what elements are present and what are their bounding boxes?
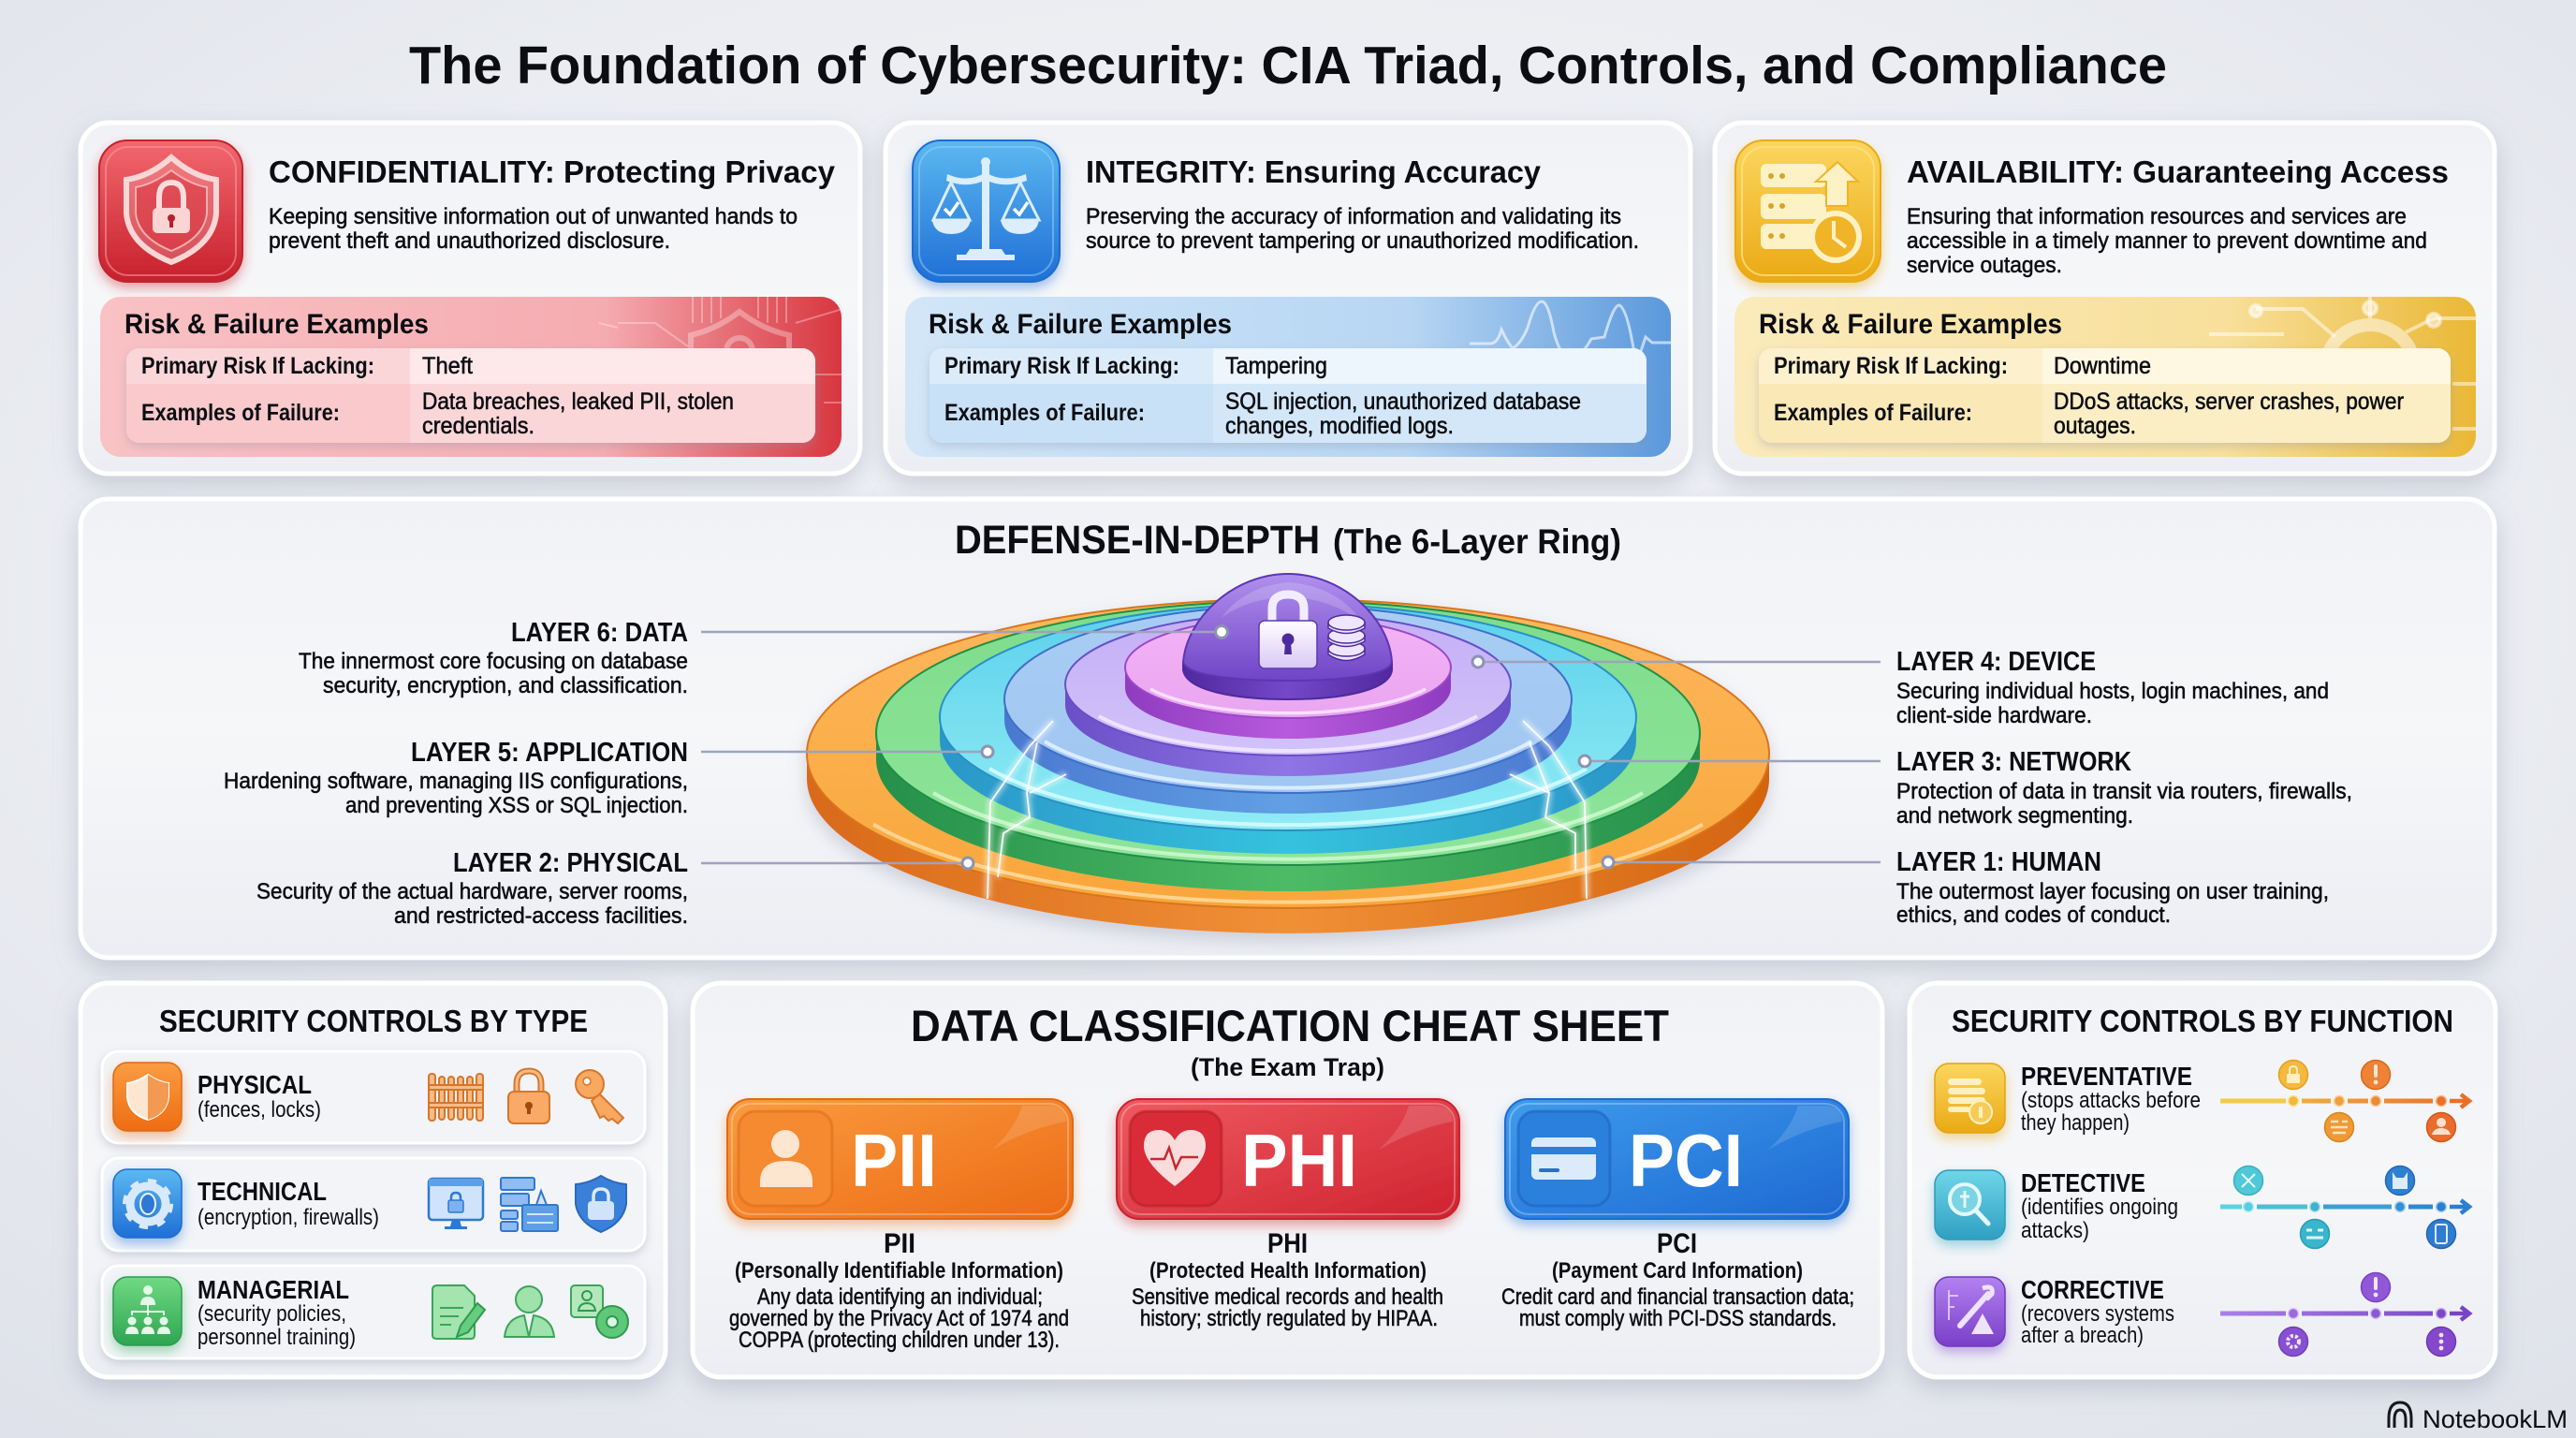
label: layer 4 bbox=[1896, 647, 2329, 728]
text: PII bbox=[729, 1228, 1069, 1353]
row: physical bbox=[102, 1051, 645, 1143]
label: layer 3 bbox=[1896, 747, 2352, 829]
title: The Foundation of Cybersecurity: CIA Triad, Controls, and Compliance bbox=[409, 36, 2167, 95]
description: Preserving the accuracy of information and validating its bbox=[1086, 204, 1621, 229]
description bbox=[1086, 204, 1639, 254]
text: PHYSICAL bbox=[198, 1070, 312, 1099]
text: they happen) bbox=[2021, 1110, 2130, 1136]
icon: purple wrench tile bbox=[1935, 1277, 2005, 1346]
text: PHI: PHI bbox=[1267, 1228, 1308, 1259]
risk table: Examples of Failure: bbox=[944, 400, 1145, 426]
label: layer 2: Security of the actual hardware, server rooms, bbox=[256, 879, 688, 904]
risk table: Primary Risk If Lacking: bbox=[944, 353, 1179, 379]
icon: person bbox=[760, 1130, 812, 1187]
icon: key bbox=[576, 1070, 623, 1123]
risk table: Tampering bbox=[1225, 353, 1327, 379]
row: corrective bbox=[1935, 1273, 2469, 1356]
label: layer 5: LAYER 5: APPLICATION bbox=[411, 738, 688, 768]
layer 3 cyan ring bbox=[940, 604, 1636, 854]
text: PII: Any data identifying an individual; bbox=[757, 1284, 1043, 1310]
description: accessible in a timely manner to prevent downtime and bbox=[1907, 228, 2427, 254]
label: layer 2: and restricted-access facilities. bbox=[394, 903, 688, 929]
label: layer 1 bbox=[1896, 847, 2329, 928]
panel: availability bbox=[1715, 123, 2495, 474]
panel: integrity bbox=[886, 123, 1690, 474]
heading: SECURITY CONTROLS BY TYPE bbox=[159, 1004, 588, 1038]
text: PREVENTATIVE bbox=[2021, 1062, 2192, 1091]
label: layer 4: Securing individual hosts, login machines, and bbox=[1896, 679, 2329, 704]
text: PII: COPPA (protecting children under 13). bbox=[739, 1328, 1060, 1353]
badge: PII bbox=[727, 1099, 1073, 1219]
icon: profile and gear bbox=[571, 1285, 628, 1338]
section heading: DEFENSE-IN-DEPTH bbox=[955, 518, 1320, 563]
risk table: outages. bbox=[2054, 413, 2136, 439]
risk table: Primary Risk If Lacking: bbox=[1774, 353, 2008, 379]
label: layer 6: LAYER 6: DATA bbox=[511, 618, 688, 648]
risk table: Theft bbox=[422, 353, 473, 379]
row: detective bbox=[1935, 1167, 2469, 1249]
icon: cyan magnifier tile bbox=[1935, 1170, 2005, 1240]
section heading: (The 6-Layer Ring) bbox=[1333, 522, 1621, 561]
text bbox=[198, 1275, 356, 1350]
layer 1 orange ring bbox=[807, 599, 1769, 933]
text: (fences, locks) bbox=[198, 1097, 321, 1123]
section heading bbox=[955, 518, 1621, 563]
icon: person bbox=[505, 1286, 554, 1337]
text: PHI: history; strictly regulated by HIPAA. bbox=[1140, 1306, 1438, 1331]
label: layer 3: LAYER 3: NETWORK bbox=[1896, 747, 2131, 777]
panel: data classification cheat sheet bbox=[693, 983, 1882, 1377]
text: attacks) bbox=[2021, 1218, 2089, 1243]
text: TECHNICAL bbox=[198, 1177, 327, 1206]
description: Ensuring that information resources and services are bbox=[1907, 204, 2407, 229]
icon: green org chart tile bbox=[113, 1277, 182, 1345]
description bbox=[1907, 204, 2427, 278]
text: PHI: (Protected Health Information) bbox=[1149, 1258, 1427, 1284]
layer 6 pink ring bbox=[1125, 617, 1451, 739]
risk heading: Risk & Failure Examples bbox=[124, 309, 429, 340]
layer 5 violet ring bbox=[1065, 613, 1511, 776]
risk table: Downtime bbox=[2054, 353, 2151, 379]
row: preventative bbox=[1935, 1060, 2469, 1142]
risk table bbox=[126, 348, 815, 443]
text bbox=[2021, 1062, 2201, 1136]
text: PCI bbox=[1501, 1228, 1854, 1331]
risk heading: Risk & Failure Examples bbox=[929, 309, 1232, 340]
text: personnel training) bbox=[198, 1325, 356, 1350]
text: PII: PII bbox=[884, 1228, 915, 1259]
text bbox=[2021, 1168, 2178, 1243]
risk table: Data breaches, leaked PII, stolen bbox=[422, 389, 734, 415]
layer 4 blue ring bbox=[1004, 606, 1572, 814]
icon: card bbox=[1531, 1137, 1596, 1180]
risk table bbox=[929, 348, 1647, 443]
icon: document and pen bbox=[432, 1285, 485, 1339]
icon: lock bbox=[508, 1071, 549, 1123]
label: layer 6: security, encryption, and classification. bbox=[323, 673, 688, 698]
heading: CONFIDENTIALITY: Protecting Privacy bbox=[269, 154, 836, 189]
label: layer 5: and preventing XSS or SQL injection. bbox=[345, 793, 688, 818]
description: prevent theft and unauthorized disclosure. bbox=[269, 228, 670, 254]
risk table bbox=[1759, 348, 2451, 443]
icon: orange shield tile bbox=[113, 1063, 182, 1131]
text: PII: governed by the Privacy Act of 1974 and bbox=[729, 1306, 1069, 1331]
text: PCI: must comply with PCI-DSS standards. bbox=[1519, 1306, 1837, 1331]
text: PCI: PCI bbox=[1657, 1228, 1697, 1259]
timeline bbox=[2220, 1060, 2469, 1142]
heading: INTEGRITY: Ensuring Accuracy bbox=[1086, 154, 1542, 189]
icon: heart with pulse bbox=[1144, 1130, 1206, 1186]
panel: confidentiality bbox=[80, 123, 860, 474]
description: service outages. bbox=[1907, 253, 2062, 278]
text: CORRECTIVE bbox=[2021, 1275, 2164, 1304]
description: source to prevent tampering or unauthorized modification. bbox=[1086, 228, 1639, 254]
risk table: changes, modified logs. bbox=[1225, 413, 1454, 439]
icon: monitor bbox=[429, 1179, 483, 1229]
text: (stops attacks before bbox=[2021, 1088, 2201, 1113]
icon: database bbox=[1328, 615, 1365, 661]
icon: yellow stack tile bbox=[1935, 1064, 2005, 1133]
label: layer 6 bbox=[299, 618, 688, 698]
panel: security controls by function bbox=[1910, 983, 2496, 1377]
risk box bbox=[905, 297, 1671, 457]
NotebookLM watermark: NotebookLM bbox=[2422, 1405, 2568, 1433]
leader lines and dots bbox=[701, 625, 1881, 869]
label: layer 5 bbox=[224, 738, 688, 818]
text: PII: (Personally Identifiable Information) bbox=[735, 1258, 1063, 1284]
label: layer 4: client-side hardware. bbox=[1896, 703, 2092, 728]
label: layer 3: and network segmenting. bbox=[1896, 803, 2133, 829]
label: layer 1: LAYER 1: HUMAN bbox=[1896, 847, 2101, 877]
text: (security policies, bbox=[198, 1301, 346, 1327]
icon: blue shield bbox=[576, 1176, 626, 1232]
icon: server firewall bbox=[501, 1178, 558, 1231]
row: managerial bbox=[102, 1266, 645, 1358]
risk table: SQL injection, unauthorized database bbox=[1225, 389, 1581, 415]
risk table: Examples of Failure: bbox=[1774, 400, 1972, 426]
badge: PCI bbox=[1505, 1099, 1849, 1219]
icon: server with arrow and clock bbox=[1735, 140, 1881, 282]
heading: DATA CLASSIFICATION CHEAT SHEET bbox=[911, 1001, 1669, 1050]
panel: defense in depth bbox=[80, 499, 2495, 958]
description bbox=[269, 204, 798, 254]
badge label: PII bbox=[851, 1119, 937, 1202]
risk table: Primary Risk If Lacking: bbox=[141, 353, 374, 379]
text bbox=[2021, 1275, 2174, 1348]
text bbox=[198, 1177, 379, 1230]
label: layer 3: Protection of data in transit via routers, firewalls, bbox=[1896, 779, 2352, 804]
layered ring diagram bbox=[701, 574, 1881, 933]
subheading: (The Exam Trap) bbox=[1191, 1053, 1384, 1081]
text: DETECTIVE bbox=[2021, 1168, 2145, 1197]
text: (encryption, firewalls) bbox=[198, 1205, 379, 1230]
panel: security controls by type bbox=[80, 983, 666, 1377]
text: PCI: Credit card and financial transaction data; bbox=[1501, 1284, 1854, 1310]
icon: blue gear tile bbox=[113, 1169, 182, 1238]
text: PCI: (Payment Card Information) bbox=[1552, 1258, 1803, 1284]
risk table: credentials. bbox=[422, 413, 534, 439]
layer 2 green ring bbox=[876, 601, 1700, 891]
label: layer 4: LAYER 4: DEVICE bbox=[1896, 647, 2096, 677]
risk table: Examples of Failure: bbox=[141, 400, 340, 426]
lightning glow bbox=[988, 721, 1587, 899]
label: layer 5: Hardening software, managing IIS configurations, bbox=[224, 769, 688, 794]
purple core dome bbox=[1183, 574, 1392, 699]
heading: SECURITY CONTROLS BY FUNCTION bbox=[1952, 1004, 2453, 1038]
text: after a breach) bbox=[2021, 1323, 2144, 1348]
icon: blue scales bbox=[913, 140, 1060, 282]
risk box bbox=[100, 297, 842, 457]
text bbox=[198, 1070, 321, 1123]
label: layer 1: ethics, and codes of conduct. bbox=[1896, 902, 2171, 928]
label: layer 1: The outermost layer focusing on user training, bbox=[1896, 879, 2329, 904]
label: layer 2: LAYER 2: PHYSICAL bbox=[453, 848, 688, 878]
badge label: PCI bbox=[1629, 1119, 1743, 1202]
row: technical bbox=[102, 1158, 645, 1251]
text: PHI bbox=[1132, 1228, 1443, 1331]
risk box bbox=[1734, 297, 2476, 457]
text: (identifies ongoing bbox=[2021, 1195, 2178, 1220]
text: MANAGERIAL bbox=[198, 1275, 349, 1304]
text: (recovers systems bbox=[2021, 1301, 2174, 1327]
badge: PHI bbox=[1117, 1099, 1459, 1219]
text: PHI: Sensitive medical records and health bbox=[1132, 1284, 1443, 1310]
icon: fence bbox=[429, 1074, 483, 1121]
label: layer 2 bbox=[256, 848, 688, 929]
icon: padlock bbox=[1259, 594, 1317, 668]
timeline bbox=[2220, 1167, 2469, 1249]
heading: AVAILABILITY: Guaranteeing Access bbox=[1907, 154, 2449, 189]
label: layer 6: The innermost core focusing on database bbox=[299, 649, 688, 674]
badge label: PHI bbox=[1241, 1119, 1357, 1202]
risk table: DDoS attacks, server crashes, power bbox=[2054, 389, 2404, 415]
icon: red shield with lock bbox=[99, 140, 242, 282]
timeline bbox=[2220, 1273, 2469, 1356]
risk heading: Risk & Failure Examples bbox=[1759, 309, 2062, 340]
description: Keeping sensitive information out of unwanted hands to bbox=[269, 204, 798, 229]
